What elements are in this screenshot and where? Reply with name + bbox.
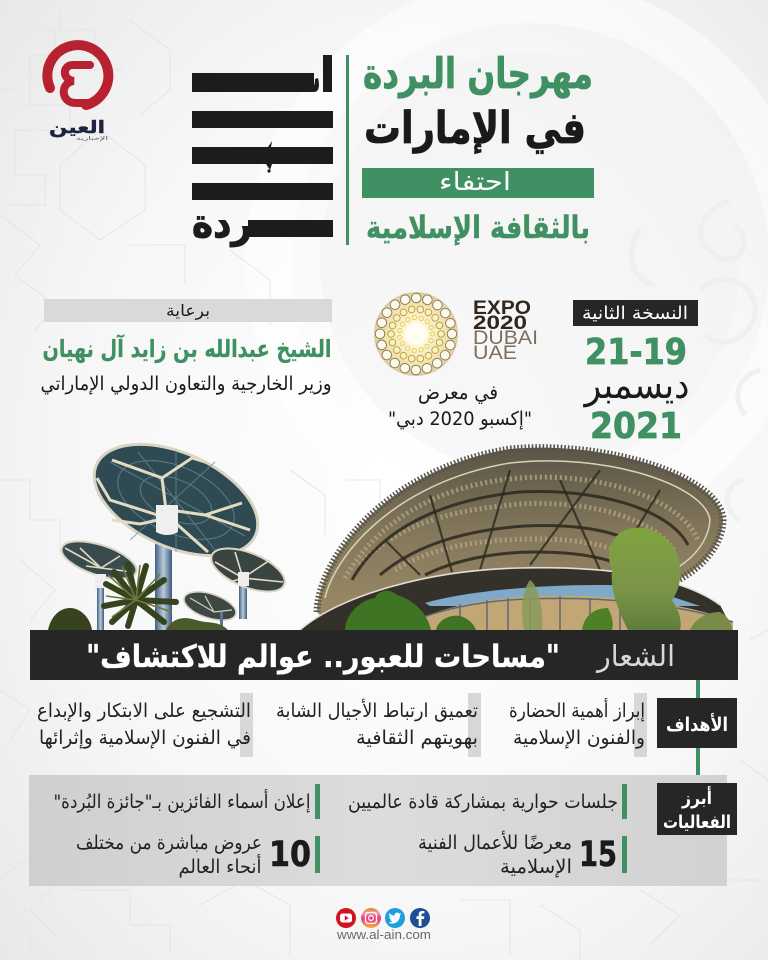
goal 3: في الفنون الإسلامية وإثرائها [39,727,251,750]
patron block: وزير الخارجية والتعاون الدولي الإماراتي [40,373,332,395]
Expo 2020 logo: UAE [473,343,517,364]
events heading: أبرز [681,786,712,809]
goal 2: بهويتهم الثقافية [356,727,478,749]
slogan band [30,630,738,680]
icon: Twitter [385,908,405,928]
edition and date: النسخة الثانية [582,303,688,324]
icon: YouTube [336,908,356,928]
vertical divider [346,55,349,245]
goals heading: الأهداف [666,713,728,736]
patron block: الشيخ عبدالله بن زايد آل نهيان [42,334,332,363]
edition and date [573,300,698,447]
left solar tree [57,534,141,630]
social icons [336,908,430,928]
edition and date: 21-19 [585,332,687,373]
title block: مهرجان البردة [363,49,593,99]
events heading: الفعاليات [663,812,731,833]
icon: Facebook [410,908,430,928]
event: 15 exhibitions: معرضًا للأعمال الفنية [418,831,572,854]
event: 10 live shows: عروض مباشرة من مختلف [76,832,262,854]
event: 10 live shows [76,832,320,878]
goal 1 [509,693,647,757]
goal 3 [37,693,253,757]
festival logo: Al-Burda [192,55,333,247]
patron block [40,299,332,395]
right solar tree [205,540,291,619]
website url: www.al-ain.com [336,928,431,942]
goal 1: والفنون الإسلامية [513,727,645,749]
event: 15 exhibitions: الإسلامية [500,856,572,878]
Expo 2020 logo [374,292,538,376]
event: award winners [54,784,320,819]
event: dialogue sessions [348,784,627,819]
dome greenery [345,528,732,630]
edition and date: ديسمبر [583,363,690,408]
goal 3: التشجيع على الابتكار والإبداع [37,700,251,722]
slogan band: الشعار [595,639,675,673]
goals heading [657,698,737,748]
icon: Instagram [361,908,381,928]
title block: في الإمارات [364,103,586,154]
edition and date: 2021 [590,406,682,447]
small solar tree [181,586,239,630]
Expo 2020 logo: EXPO [473,298,531,319]
event: 15 exhibitions [418,831,627,878]
event: award winners: إعلان أسماء الفائزين بـ"جائزة البُردة" [54,789,310,814]
large solar tree [77,422,275,630]
logo: Al-Ain: الإخبارية [76,136,108,142]
logo: Al-Ain [47,45,108,142]
title block: احتفاء [439,167,511,196]
photo: Terra pavilion solar trees [48,422,291,630]
festival logo: Al-Burda: ردة [192,201,252,247]
dome base ring [300,568,733,630]
photo: Al Wasl dome [300,448,733,630]
connector line [696,680,700,784]
event: 15 exhibitions: 15 [579,835,617,875]
goal 2 [276,693,481,757]
Expo 2020 logo: DUBAI [473,328,538,349]
logo: Al-Ain: العين [49,118,105,138]
event: dialogue sessions: جلسات حوارية بمشاركة قادة عالميين [348,791,618,813]
patron block: برعاية [166,301,210,321]
events heading [657,783,737,835]
Expo 2020 logo: 2020 [473,313,527,334]
event: 10 live shows: أنحاء العالم [178,854,262,878]
events panel [29,775,727,886]
goal 1: إبراز أهمية الحضارة [509,698,645,723]
title block [362,49,594,246]
venue text: "إكسبو 2020 دبي" [388,408,532,431]
venue text [388,380,532,431]
title block: بالثقافة الإسلامية [366,210,590,246]
event: 10 live shows: 10 [269,835,311,875]
slogan band: "مساحات للعبور.. عوالم للاكتشاف" [86,639,560,675]
goal 2: تعميق ارتباط الأجيال الشابة [276,699,478,722]
venue text: في معرض [418,380,498,405]
palm trees [48,564,228,630]
